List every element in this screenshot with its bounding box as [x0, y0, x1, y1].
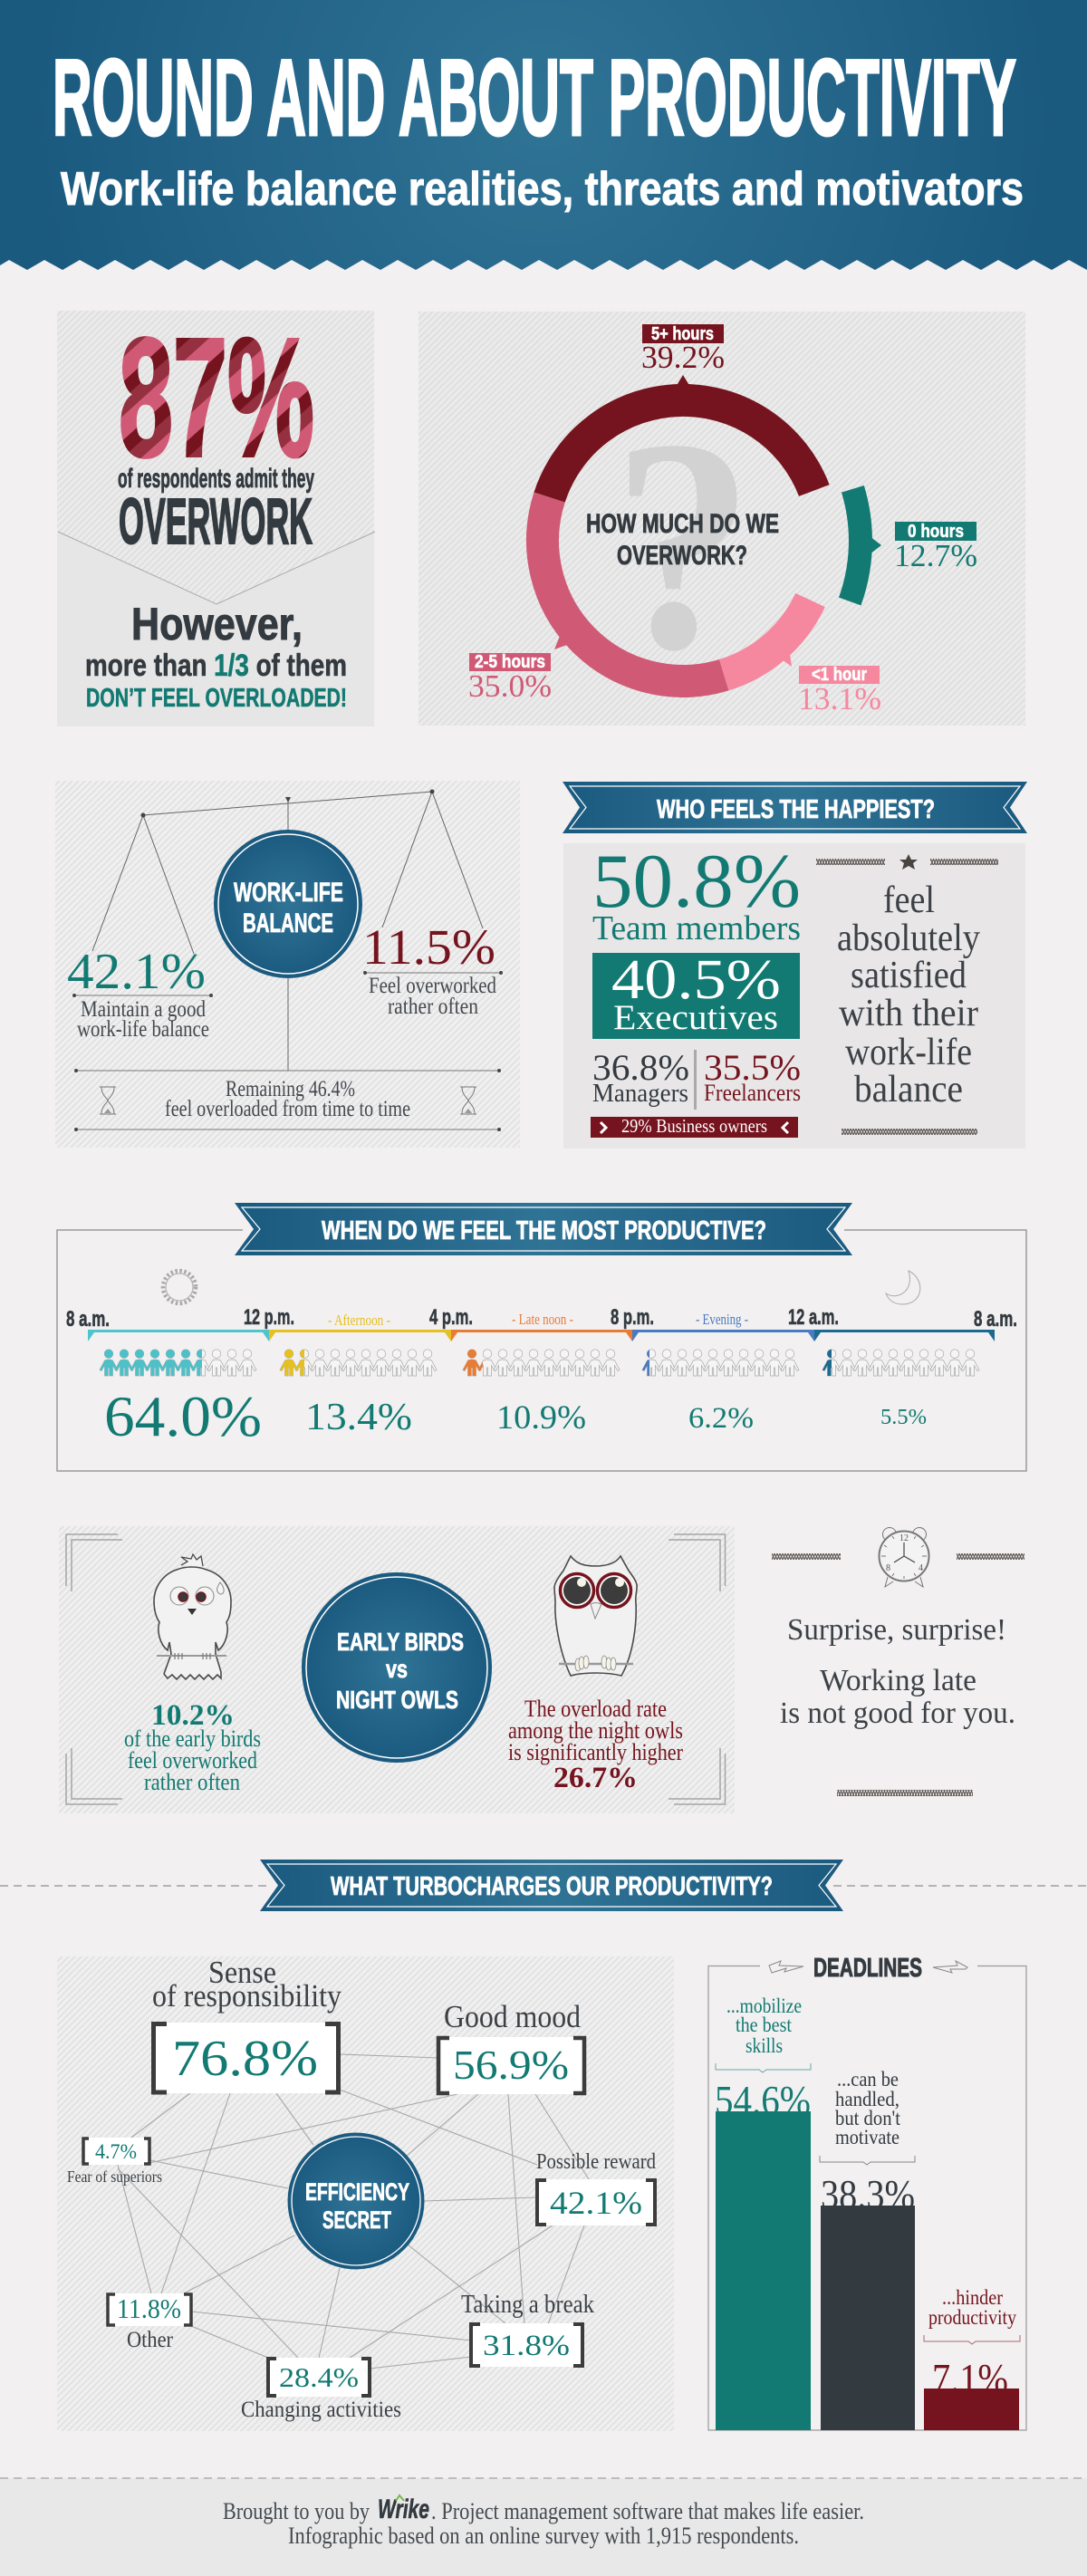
- stat team members: Team members: [592, 909, 801, 947]
- remaining text: [165, 1077, 410, 1121]
- banner: who feels the happiest: [563, 782, 1027, 833]
- node: sense of responsibility: [152, 1955, 341, 2093]
- time labels: 8 a.m.: [974, 1307, 1017, 1331]
- banner: what turbocharges our productivity: WHAT TURBOCHARGES OUR PRODUCTIVITY?: [331, 1872, 773, 1901]
- footer: [0, 2478, 1087, 2576]
- icon: lightning left: [769, 1961, 803, 1973]
- stat executives: Executives: [613, 998, 778, 1037]
- label under 1 hour: <1 hour: [812, 665, 867, 685]
- stat freelancers: [704, 1047, 801, 1106]
- header banner: [0, 0, 1087, 270]
- satisfied text: absolutely: [837, 918, 980, 959]
- panel: early birds vs night owls: [59, 1526, 735, 1813]
- panel: deadlines bar chart: [708, 1954, 1026, 2430]
- stat freelancers: 35.5%: [704, 1047, 801, 1088]
- circle: efficiency secret: [288, 2132, 424, 2270]
- overwork word: OVERWORK: [119, 486, 313, 558]
- bar: mobilize: 54.6%: [715, 2078, 811, 2123]
- overwork caption: of respondents admit they: [118, 464, 314, 494]
- label 2-5 hours: 2-5 hours: [475, 652, 545, 672]
- circle: work-life balance: WORK-LIFE: [234, 878, 343, 908]
- night owls stat: 26.7%: [553, 1762, 638, 1794]
- callout text: [780, 1613, 1015, 1730]
- bar: can be handled: handled,: [835, 2088, 899, 2110]
- node: changing activities: [241, 2358, 401, 2422]
- bar: mobilize: the best: [736, 2014, 793, 2036]
- callout text: Surprise, surprise!: [787, 1613, 1006, 1647]
- node: good mood: 56.9%: [453, 2043, 569, 2088]
- stat managers: [592, 1047, 689, 1108]
- panel: how much do we overwork donut: OVERWORK?: [617, 541, 747, 571]
- node: possible reward: 42.1%: [550, 2185, 642, 2221]
- early birds stat: 10.2%: [151, 1699, 235, 1732]
- productivity percentages: 5.5%: [880, 1406, 927, 1429]
- time labels: 4 p.m.: [429, 1305, 473, 1330]
- node: good mood: [438, 1999, 584, 2094]
- satisfied text: [837, 879, 980, 1110]
- period labels: - Late noon -: [512, 1311, 573, 1328]
- circle: early birds vs night owls: NIGHT OWLS: [336, 1686, 458, 1714]
- icon: moon: [886, 1271, 920, 1304]
- node: fear of superiors: 4.7%: [95, 2140, 137, 2163]
- time labels: 8 a.m.: [66, 1307, 110, 1331]
- not overloaded text: DON’T FEEL OVERLOADED!: [86, 684, 347, 713]
- circle: work-life balance: BALANCE: [243, 908, 333, 938]
- donut chart: [543, 375, 881, 681]
- stat 11.5%: rather often: [388, 995, 478, 1019]
- circle: early birds vs night owls: [302, 1572, 492, 1763]
- panel: how much do we overwork donut: [418, 312, 1025, 726]
- node: possible reward: [536, 2150, 656, 2225]
- people pictograms: [100, 1350, 979, 1376]
- banner: most productive: WHEN DO WE FEEL THE MOST PRODUCTIVE?: [322, 1216, 766, 1245]
- time labels: 12 p.m.: [244, 1305, 294, 1330]
- bar: can be handled: 38.3%: [821, 2172, 915, 2217]
- label under 1 hour: [798, 665, 881, 716]
- label 0 hours: [894, 522, 977, 573]
- node: changing activities: 28.4%: [279, 2361, 359, 2393]
- callout text: is not good for you.: [780, 1697, 1015, 1730]
- corner brackets: [66, 1534, 725, 1804]
- label 5+ hours: [641, 324, 725, 375]
- banner: what turbocharges our productivity: [0, 1860, 1087, 1911]
- label 5+ hours: 5+ hours: [651, 324, 714, 344]
- stat 42.1%: work-life balance: [77, 1017, 209, 1042]
- callout: working late: [772, 1527, 1024, 1796]
- timeline: [88, 1330, 995, 1341]
- bar: can be handled: ...can be: [837, 2068, 899, 2091]
- ornaments: [772, 1553, 1024, 1796]
- stat executives: [592, 949, 800, 1039]
- node: taking a break: [461, 2291, 594, 2367]
- node: possible reward: Possible reward: [536, 2150, 656, 2174]
- period labels: - Afternoon -: [328, 1312, 390, 1329]
- stat 42.1%: 42.1%: [67, 944, 206, 1000]
- node: taking a break: Taking a break: [461, 2291, 594, 2319]
- deadlines heading: DEADLINES: [813, 1954, 922, 1983]
- remaining text: Remaining 46.4%: [226, 1077, 355, 1101]
- node: good mood: Good mood: [444, 1999, 581, 2034]
- bar: can be handled: [820, 2068, 915, 2430]
- stat 11.5%: 11.5%: [362, 919, 495, 975]
- node: sense of responsibility: Sense: [208, 1955, 276, 1990]
- time labels: 8 p.m.: [611, 1305, 654, 1330]
- banner: who feels the happiest: WHO FEELS THE HAPPIEST?: [657, 795, 935, 824]
- node: fear of superiors: Fear of superiors: [67, 2167, 162, 2186]
- scale lines: [74, 792, 501, 1129]
- stat 42.1%: Maintain a good: [81, 997, 206, 1022]
- panel: efficiency secret network: [57, 1955, 674, 2431]
- satisfied text: feel: [883, 879, 935, 921]
- early birds stat: rather often: [144, 1769, 240, 1795]
- productivity percentages: [104, 1384, 927, 1448]
- footer text: [223, 2498, 864, 2549]
- productivity percentages: 6.2%: [688, 1402, 754, 1435]
- time labels: 12 a.m.: [788, 1305, 839, 1330]
- stat business owners: 29% Business owners: [621, 1115, 767, 1137]
- bar: mobilize: ...mobilize: [726, 1994, 802, 2017]
- node: other: 11.8%: [117, 2292, 181, 2324]
- node: taking a break: 31.8%: [483, 2330, 570, 2362]
- bar: hinder: productivity: [928, 2306, 1016, 2329]
- night owls stat: The overload rate: [524, 1696, 667, 1722]
- stat team members: 50.8%: [592, 839, 801, 924]
- icon: sun: [163, 1271, 196, 1303]
- early birds stat: feel overworked: [128, 1747, 257, 1773]
- night owls stat: [508, 1696, 683, 1794]
- icon: owl: [554, 1556, 637, 1676]
- footer text: . Project management software that makes life easier.: [431, 2498, 864, 2524]
- stat 11.5%: Feel overworked: [369, 974, 496, 998]
- bar: can be handled: motivate: [835, 2126, 899, 2148]
- donut heading: HOW MUCH DO WE: [586, 509, 779, 539]
- stat managers: 36.8%: [592, 1047, 689, 1088]
- one third text: more than 1/3 of them: [85, 649, 347, 683]
- period labels: [328, 1311, 748, 1329]
- stat freelancers: Freelancers: [704, 1080, 801, 1106]
- label 2-5 hours: [468, 652, 552, 704]
- satisfied text: with their: [839, 993, 978, 1034]
- circle: early birds vs night owls: vs: [386, 1655, 408, 1683]
- icon: alarm clock: [879, 1527, 929, 1587]
- stat 11.5%: [362, 919, 496, 1019]
- label 5+ hours: 39.2%: [641, 340, 725, 375]
- early birds stat: of the early birds: [124, 1725, 261, 1752]
- time labels: [66, 1305, 1017, 1331]
- zigzag ornaments and star: [816, 854, 998, 1135]
- circle: efficiency secret: EFFICIENCY: [305, 2178, 409, 2206]
- network lines: [118, 2054, 589, 2369]
- productivity percentages: 13.4%: [305, 1397, 412, 1438]
- label 0 hours: 0 hours: [908, 522, 964, 542]
- logo: Wrike: Wrike: [378, 2494, 429, 2524]
- productivity percentages: 10.9%: [496, 1399, 586, 1437]
- stat managers: Managers: [592, 1080, 688, 1108]
- label 0 hours: 12.7%: [894, 538, 977, 573]
- bar: hinder: [924, 2286, 1020, 2430]
- footer text: Brought to you by: [223, 2498, 370, 2524]
- callout text: Working late: [820, 1664, 976, 1697]
- circle: early birds vs night owls: EARLY BIRDS: [337, 1628, 464, 1656]
- node: changing activities: Changing activities: [241, 2398, 401, 2422]
- remaining text: feel overloaded from time to time: [165, 1097, 410, 1121]
- productivity percentages: 64.0%: [104, 1384, 262, 1448]
- icon: hourglass left: [100, 1087, 116, 1114]
- satisfied text: balance: [854, 1069, 963, 1110]
- panel: who feels the happiest: [563, 839, 1025, 1149]
- bar: mobilize: [715, 1994, 811, 2430]
- node: fear of superiors: [67, 2138, 162, 2186]
- stat 42.1%: [67, 944, 209, 1042]
- node: sense of responsibility: 76.8%: [172, 2031, 318, 2087]
- banner: most productive: [235, 1203, 852, 1255]
- node: other: Other: [127, 2328, 174, 2352]
- panel: work-life balance scale: [55, 781, 520, 1148]
- icon: question mark: ?: [612, 377, 754, 713]
- satisfied text: work-life: [845, 1032, 972, 1073]
- panel: 87% overwork: [57, 304, 375, 726]
- node: other: [108, 2292, 191, 2352]
- label under 1 hour: 13.1%: [798, 681, 881, 716]
- satisfied text: satisfied: [851, 955, 967, 996]
- however: However,: [131, 599, 303, 649]
- icon: alarm clock: 4: [919, 1563, 923, 1573]
- bar: hinder: 7.1%: [932, 2356, 1008, 2401]
- night owls stat: among the night owls: [508, 1717, 683, 1744]
- footer text: Infographic based on an online survey with 1,915 respondents.: [288, 2523, 799, 2549]
- icon: tired bird: [154, 1554, 231, 1679]
- early birds stat: [124, 1699, 261, 1795]
- period labels: - Evening -: [696, 1311, 748, 1328]
- bar: hinder: ...hinder: [942, 2286, 1003, 2309]
- icon: alarm clock: 8: [886, 1563, 890, 1573]
- label 2-5 hours: 35.0%: [468, 668, 552, 704]
- circle: efficiency secret: SECRET: [322, 2206, 391, 2234]
- stat executives: 40.5%: [611, 949, 781, 1011]
- icon: lightning right: [933, 1961, 967, 1973]
- icon: alarm clock: 12: [899, 1533, 909, 1543]
- night owls stat: is significantly higher: [508, 1739, 683, 1765]
- node: sense of responsibility: of responsibility: [152, 1978, 341, 2014]
- icon: hourglass right: [460, 1087, 476, 1114]
- circle: work-life balance: [214, 830, 362, 978]
- panel: when do we feel the most productive: [57, 1203, 1026, 1471]
- big stat 87%: 87%: [119, 304, 314, 492]
- bar: can be handled: but don't: [835, 2107, 901, 2129]
- bar: mobilize: skills: [746, 2034, 783, 2057]
